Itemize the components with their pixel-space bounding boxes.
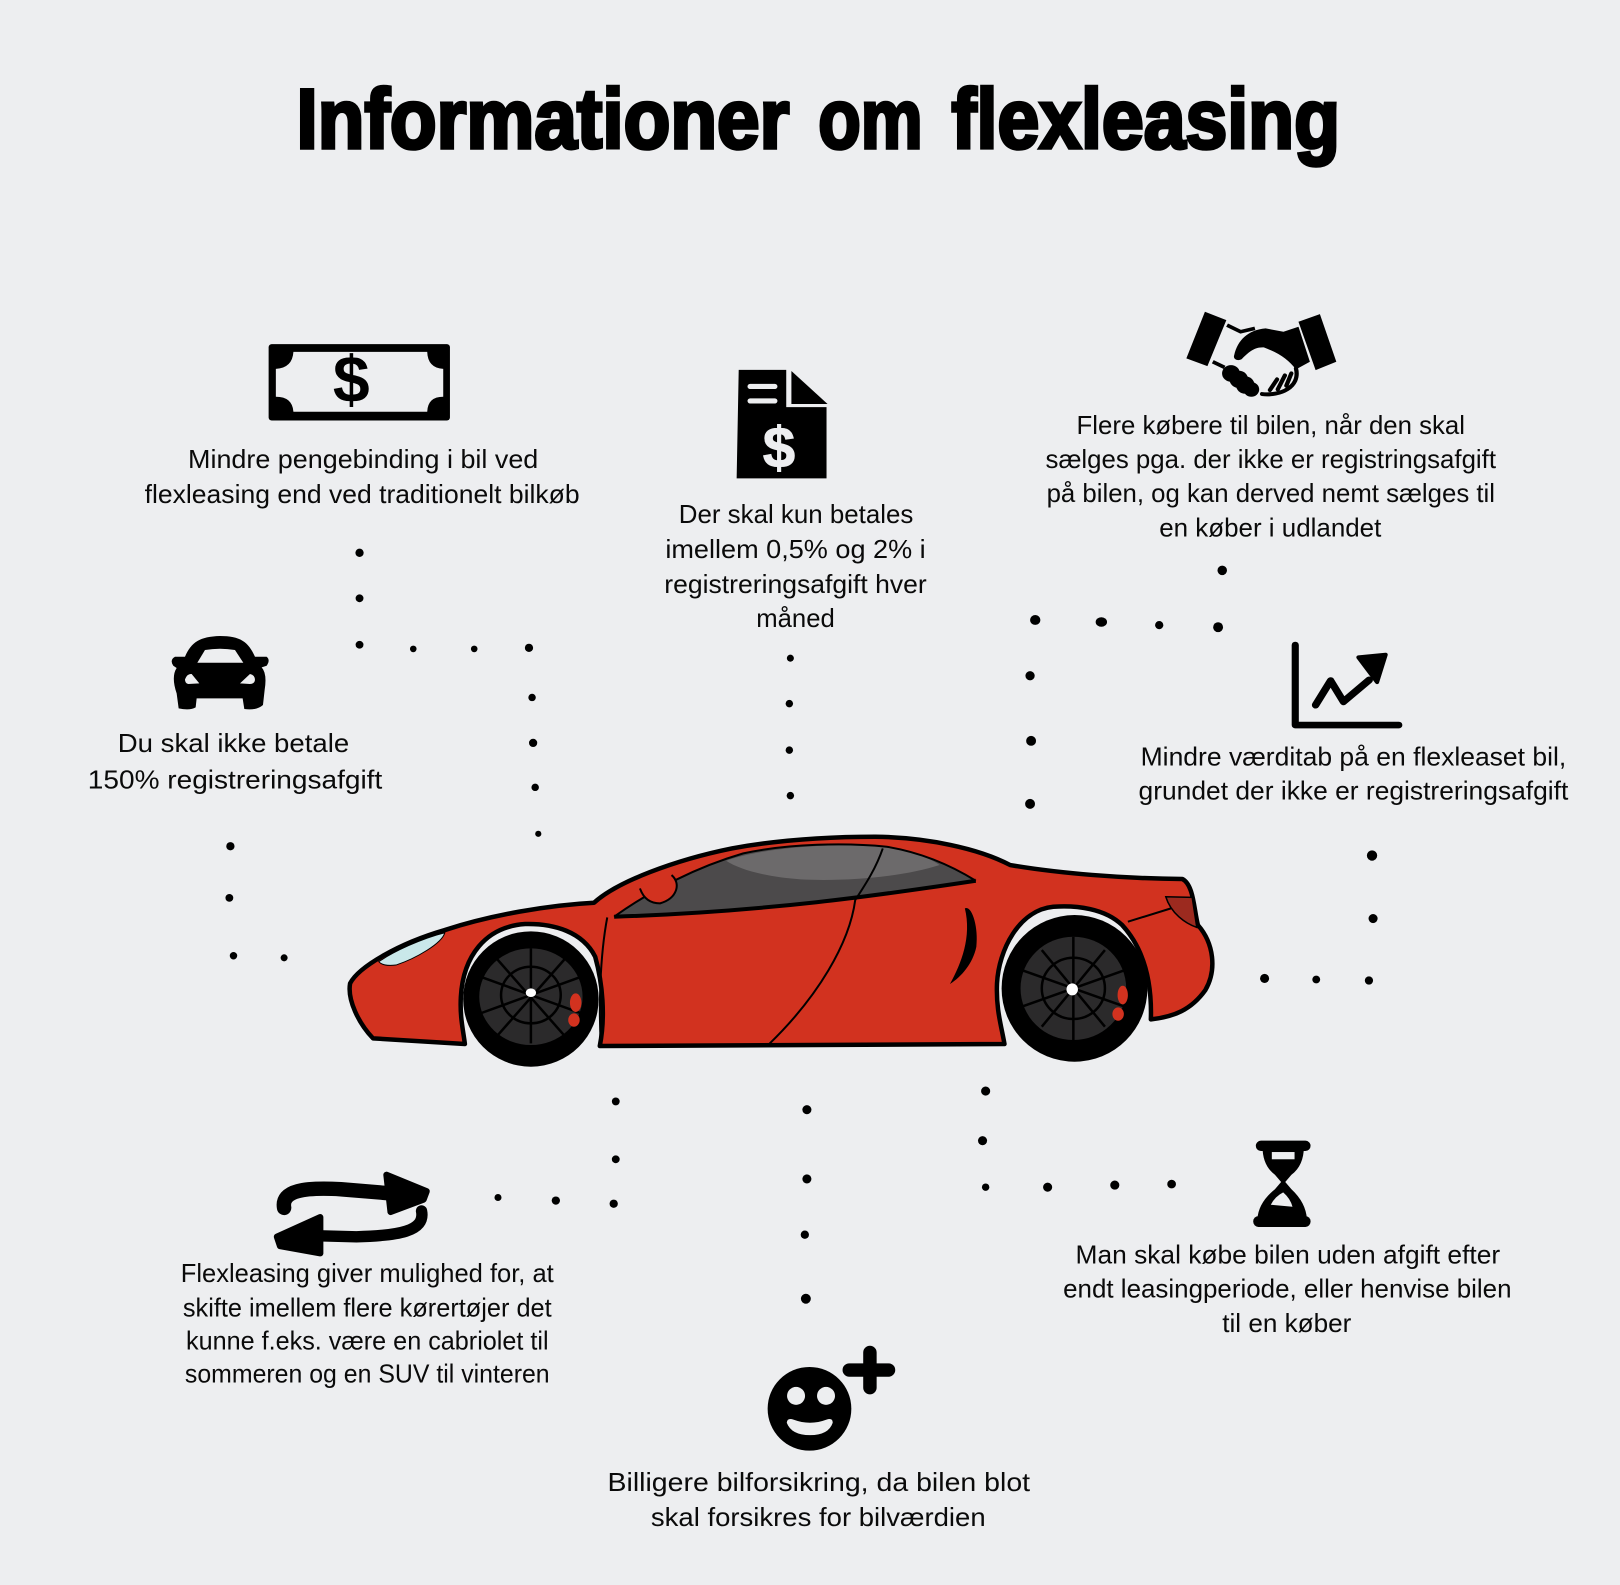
- text: køb uden afgift: Man skal købe bilen uden afgift efter: [1076, 1240, 1500, 1270]
- text: ingen 150% afgift: [88, 728, 383, 794]
- text: flere købere: [1046, 410, 1497, 542]
- dotted connector: købere to car: [1025, 566, 1227, 809]
- windows: [614, 844, 976, 917]
- panel: køb uden afgift: [1063, 1141, 1512, 1338]
- headlight: [379, 933, 445, 965]
- panel: ingen 150% afgift: [88, 636, 383, 794]
- panel: flere købere: [1046, 312, 1497, 542]
- text: registreringsafgift: Der skal kun betales: [679, 499, 913, 529]
- text: billigere forsikring: [607, 1467, 1031, 1532]
- text: mindre pengebinding: Mindre pengebinding i bil ved: [188, 444, 538, 474]
- icon: swap arrows: [277, 1175, 427, 1253]
- dotted connector: 150% afgift to car: [225, 842, 288, 961]
- panel: skifte kørertøjer: [181, 1175, 554, 1388]
- text: skifte kørertøjer: Flexleasing giver mulighed for, at: [181, 1258, 554, 1288]
- window sill: [614, 881, 976, 917]
- panel: registreringsafgift hver måned: [664, 370, 927, 633]
- text: registreringsafgift: [664, 499, 927, 633]
- icon: dollar bill: $: [333, 343, 370, 417]
- dotted connector: registreringsafgift to car: [786, 655, 794, 799]
- text: registreringsafgift: registreringsafgift hver: [664, 569, 927, 599]
- icon: dollar bill: [269, 343, 450, 421]
- text: mindre værditab: [1139, 742, 1569, 806]
- dotted connector: værditab to car: [1260, 850, 1378, 985]
- text: skifte kørertøjer: sommeren og en SUV til vinteren: [185, 1358, 550, 1388]
- text: køb uden afgift: til en køber: [1222, 1308, 1352, 1338]
- panel: mindre pengebinding: [145, 343, 580, 509]
- icon: rising chart: [1295, 645, 1399, 725]
- text: registreringsafgift: imellem 0,5% og 2% i: [665, 534, 926, 564]
- rear light: [1166, 897, 1197, 927]
- text: skifte kørertøjer: kunne f.eks. være en cabriolet til: [186, 1325, 549, 1355]
- rear wheel: [1002, 915, 1147, 1062]
- window highlight: [726, 845, 940, 880]
- title: flexleasing: [952, 71, 1340, 166]
- side mirror: [640, 875, 677, 903]
- text: flere købere: en køber i udlandet: [1159, 512, 1382, 542]
- text: køb uden afgift: [1063, 1240, 1512, 1338]
- icon: document with dollar: [737, 370, 828, 480]
- text: køb uden afgift: endt leasingperiode, eller henvise bilen: [1063, 1274, 1512, 1304]
- rear line: [1128, 908, 1171, 922]
- icon: hourglass: [1253, 1141, 1311, 1227]
- text: billigere forsikring: skal forsikres for bilværdien: [651, 1502, 986, 1532]
- title: om: [818, 71, 923, 166]
- text: flere købere: på bilen, og kan derved nemt sælges til: [1047, 478, 1495, 508]
- text: flere købere: Flere købere til bilen, når den skal: [1077, 410, 1465, 440]
- panel: mindre værditab: [1139, 645, 1569, 806]
- text: mindre pengebinding: flexleasing end ved traditionelt bilkøb: [145, 479, 580, 509]
- text: registreringsafgift: måned: [756, 603, 835, 633]
- icon: handshake: [1186, 312, 1336, 397]
- text: ingen 150% afgift: 150% registreringsafgift: [88, 764, 383, 794]
- front wheel: [463, 931, 599, 1067]
- dotted connector: køb uden afgift to car: [978, 1087, 1176, 1192]
- panel: billigere forsikring: [607, 1352, 1031, 1532]
- text: flere købere: sælges pga. der ikke er registringsafgift: [1046, 444, 1497, 474]
- icon: car front: [172, 636, 269, 709]
- mirror outline: [640, 875, 677, 903]
- car body: [350, 837, 1212, 1046]
- text: ingen 150% afgift: Du skal ikke betale: [118, 728, 349, 758]
- title: [297, 71, 1340, 166]
- text: skifte kørertøjer: [181, 1258, 554, 1388]
- text: mindre pengebinding: [145, 444, 580, 509]
- window outline: [614, 844, 976, 917]
- title: Informationer: [297, 71, 789, 166]
- icon: smiley with plus: [768, 1352, 889, 1451]
- text: mindre værditab: Mindre værditab på en flexleaset bil,: [1141, 742, 1566, 772]
- text: mindre værditab: grundet der ikke er registreringsafgift: [1139, 776, 1569, 806]
- text: billigere forsikring: Billigere bilforsikring, da bilen blot: [607, 1467, 1031, 1497]
- dotted connector: skifte to car: [494, 1097, 620, 1208]
- door lines: [600, 848, 883, 1045]
- text: skifte kørertøjer: skifte imellem flere kørertøjer det: [183, 1292, 552, 1322]
- side vent: [950, 908, 977, 984]
- dotted connector: pengebinding to car: [355, 549, 541, 837]
- central red sports car: [350, 837, 1212, 1067]
- icon: document with dollar: $: [763, 416, 795, 480]
- dotted connector: forsikring to car: [801, 1105, 811, 1304]
